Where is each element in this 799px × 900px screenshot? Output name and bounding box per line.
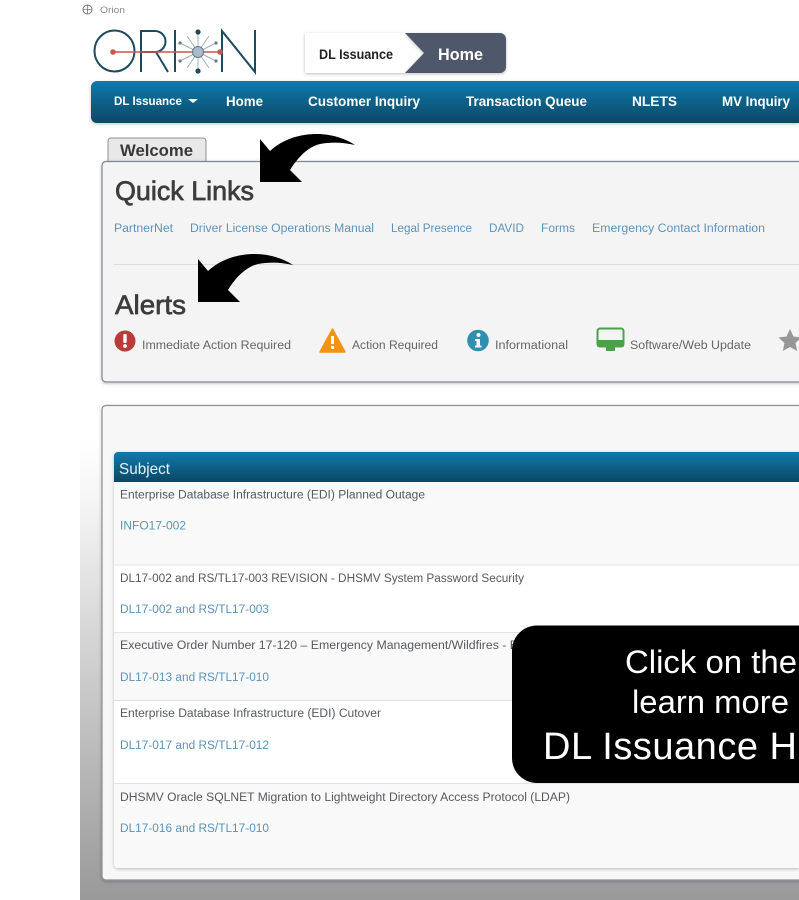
row 5: DHSMV Oracle SQLNET Migration to Lightweight Directory Access Protocol (LDAP) — [120, 792, 570, 804]
row 3 — [120, 640, 518, 684]
table header: subject: Subject — [119, 461, 171, 478]
alert legend — [114, 328, 799, 352]
heading: alerts: Alerts — [115, 290, 186, 320]
icon: informational — [467, 330, 489, 351]
callout: learn more — [632, 684, 789, 720]
row 3: Executive Order Number 17-120 – Emergency Management/Wildfires - E — [120, 640, 518, 652]
navigation bar — [91, 81, 799, 123]
quick links row: Driver License Operations Manual — [190, 223, 374, 235]
quick links row: Emergency Contact Information — [592, 223, 765, 235]
navigation bar: MV Inquiry — [722, 93, 790, 109]
alert legend: Action Required — [352, 340, 438, 352]
callout: Click on the — [625, 644, 797, 680]
icon: action required — [320, 329, 345, 352]
welcome tab: Welcome — [120, 141, 193, 160]
breadcrumb — [305, 33, 506, 73]
quick links row — [114, 223, 765, 235]
navigation bar: Customer Inquiry — [308, 93, 420, 109]
row 5 — [120, 792, 570, 835]
browser tab label: Orion — [100, 5, 125, 16]
table header: subject — [114, 452, 799, 482]
alert legend: Software/Web Update — [630, 340, 751, 352]
row 4: DL17-017 and RS/TL17-012 — [120, 740, 269, 752]
alert legend: Informational — [495, 340, 568, 352]
row 3: DL17-013 and RS/TL17-010 — [120, 672, 269, 684]
row 1: INFO17-002 — [120, 520, 186, 532]
navigation bar: DL Issuance — [114, 94, 182, 108]
navigation bar: Home — [226, 93, 263, 109]
row 4 — [120, 708, 381, 752]
quick links row: DAVID — [489, 223, 524, 235]
welcome tab — [108, 138, 206, 162]
row 1: Enterprise Database Infrastructure (EDI) Planned Outage — [120, 490, 425, 502]
navigation bar: Transaction Queue — [466, 93, 587, 109]
callout — [512, 626, 799, 783]
quick links row: PartnerNet — [114, 223, 174, 235]
row 2 — [120, 573, 524, 616]
arrow: points to alerts — [198, 254, 293, 302]
arrow: points to quick links — [260, 134, 355, 182]
page background gradient — [80, 440, 799, 900]
icon: immediate action — [114, 330, 136, 352]
panel: quick links and alerts — [102, 162, 799, 382]
callout: DL Issuance H — [543, 726, 797, 768]
row 2: DL17-002 and RS/TL17-003 REVISION - DHSMV System Password Security — [120, 573, 524, 585]
browser tab label — [83, 5, 125, 16]
row 5: DL17-016 and RS/TL17-010 — [120, 823, 269, 835]
panel: alerts table — [102, 406, 799, 880]
quick links row: Legal Presence — [391, 223, 472, 235]
breadcrumb: DL Issuance — [319, 47, 393, 62]
icon: software update — [597, 328, 624, 351]
quick links row: Forms — [541, 223, 575, 235]
table — [114, 452, 799, 868]
navigation bar: NLETS — [632, 93, 677, 109]
row 1 — [120, 490, 425, 532]
icon: star — [778, 329, 799, 351]
row 2: DL17-002 and RS/TL17-003 — [120, 604, 269, 616]
alert legend: Immediate Action Required — [142, 340, 291, 352]
row 4: Enterprise Database Infrastructure (EDI) Cutover — [120, 708, 381, 720]
heading: quick links: Quick Links — [115, 176, 254, 206]
breadcrumb: Home — [438, 46, 483, 64]
logo: ORION — [94, 29, 255, 74]
